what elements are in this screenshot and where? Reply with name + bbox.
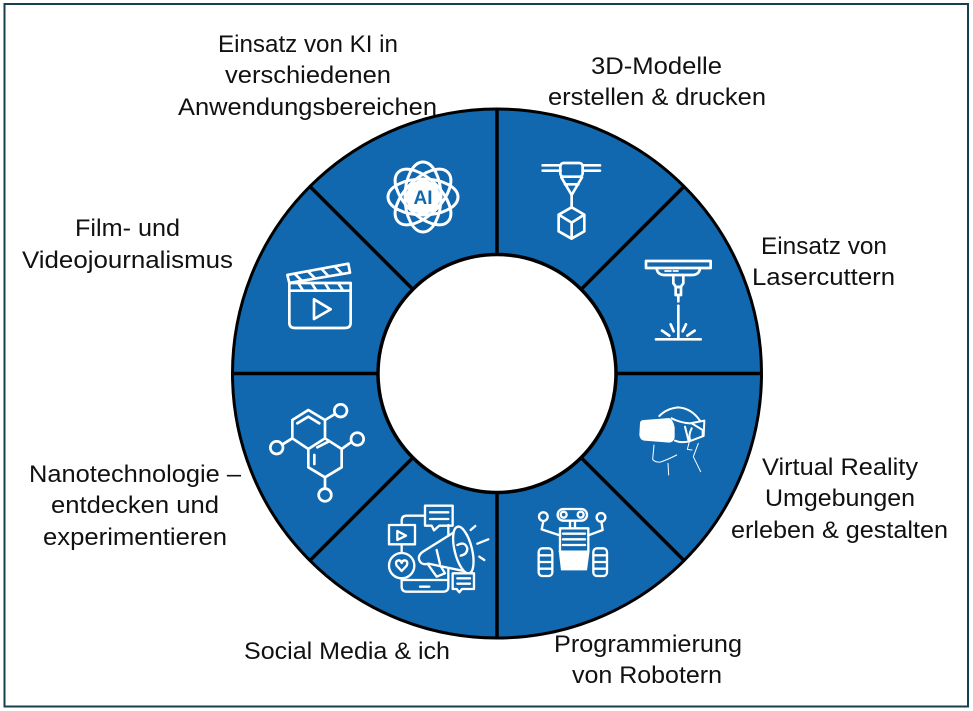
icon: laser cutter [646,261,711,339]
label: Programmierung [554,631,742,689]
label: Nanotechnologie [29,461,242,551]
label: Virtual Reality: Umgebungen [765,485,915,512]
label: Virtual Reality: erleben & gestalten [731,517,948,544]
label: Programmierung: von Robotern [572,662,722,689]
icon: robot [539,509,607,576]
label: KI: Einsatz von KI in [218,31,398,58]
label: Lasercutter: Einsatz von [761,233,887,260]
icon: 3D printer [543,163,600,239]
icon: social media megaphone [389,506,488,592]
label: 3D-Modelle: erstellen & drucken [548,84,766,111]
label: Film: Film- und [75,215,180,242]
label: Nanotechnologie: experimentieren [43,524,227,551]
icon: film clapper [287,264,351,328]
label: Nanotechnologie: Nanotechnologie – [29,461,242,488]
label: KI: verschiedenen [225,62,391,89]
label: KI [178,31,437,121]
icon: molecule [270,404,364,501]
label: KI: Anwendungsbereichen [178,94,437,121]
label: Programmierung: Programmierung [554,631,742,658]
label: Film: Videojournalismus [22,247,233,274]
label: 3D-Modelle: 3D-Modelle [591,53,722,80]
label: Virtual Reality: Virtual Reality [762,454,918,481]
icon: AI atom: AI [414,188,432,209]
ring wheel [232,109,762,638]
icon: VR headset [639,407,704,475]
label: Virtual Reality [731,454,948,544]
label: 3D-Modelle [548,53,766,111]
icon: AI atom [386,160,460,234]
label: Film [22,215,233,274]
label: Social Media: Social Media & ich [244,638,450,665]
label: Lasercutter: Lasercuttern [752,264,895,291]
label: Nanotechnologie: entdecken und [51,492,219,519]
label: Lasercutter [752,233,895,291]
